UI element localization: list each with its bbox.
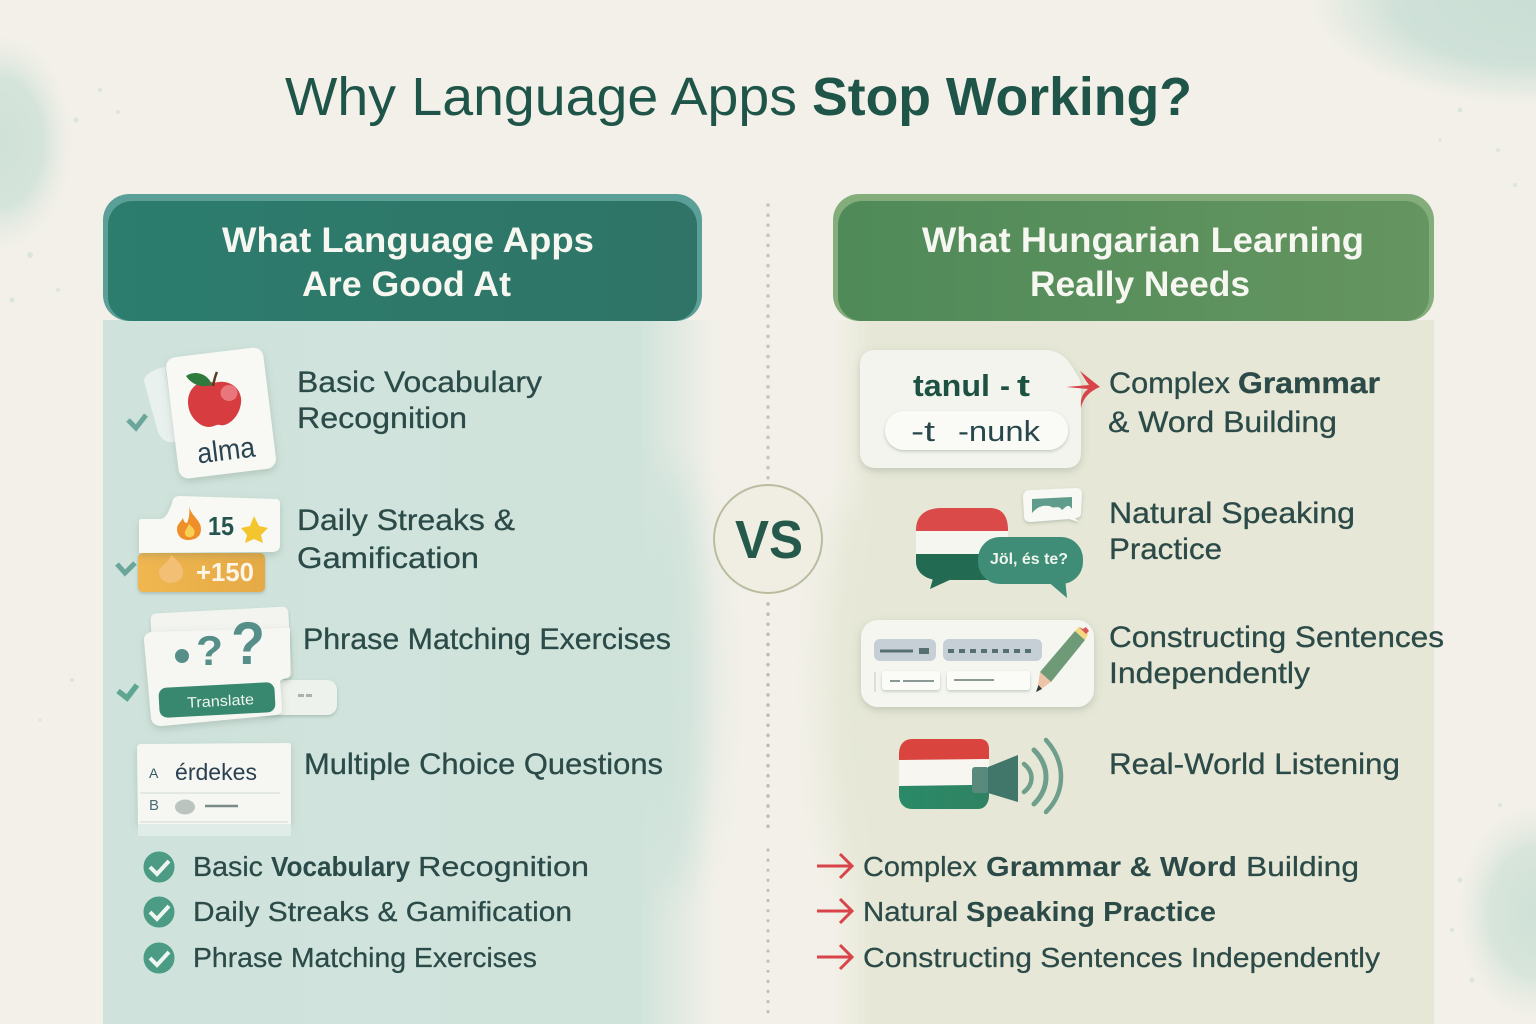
text: natural speaking practice: Practice <box>1109 533 1222 566</box>
panel heading: what language apps are good at: Are Good At <box>302 265 511 304</box>
icon: speech bubbles with flag <box>916 488 1083 598</box>
icon: translate cards: ? <box>231 610 265 677</box>
text: basic vocabulary recognition <box>297 366 542 435</box>
icon: flashcard alma: alma <box>195 431 258 470</box>
arrow item: complex grammar and word building: Building <box>1246 851 1359 882</box>
check item: basic vocabulary recognition: Vocabulary <box>271 851 410 882</box>
check item: basic vocabulary recognition: Basic <box>193 851 263 882</box>
text: constructing sentences independently <box>1109 621 1444 690</box>
icon: flag speaker <box>899 739 1061 812</box>
icon: word building card: -nunk <box>958 416 1041 448</box>
panel heading: what language apps are good at: What Language Apps <box>222 221 594 260</box>
center divider <box>766 205 770 1020</box>
arrow item: natural speaking practice <box>817 896 1216 927</box>
arrow item: constructing sentences independently: Constructing Sentences Independently <box>863 942 1380 973</box>
text: complex grammar and word building: Grammar <box>1238 367 1380 400</box>
text: daily streaks and gamification: Daily Streaks & <box>297 504 515 537</box>
title: Why Language Apps <box>285 67 797 127</box>
text: daily streaks and gamification: Gamification <box>297 542 479 575</box>
icon: multiple choice card: érdekes <box>175 759 257 785</box>
icon: multiple choice card: A <box>149 765 159 781</box>
panel heading: what language apps are good at <box>103 194 702 321</box>
left panel background <box>103 320 713 1024</box>
icon: flashcard alma <box>128 346 277 480</box>
arrow item: natural speaking practice: Speaking Practice <box>966 896 1216 927</box>
icon: multiple choice card <box>137 743 291 836</box>
text: basic vocabulary recognition: Recognition <box>297 402 467 435</box>
list: what apps do well <box>143 851 589 974</box>
VS badge <box>714 485 822 593</box>
VS badge: VS <box>735 510 803 570</box>
check item: phrase matching exercises: Phrase Matching Exercises <box>193 942 537 973</box>
arrow: to complex grammar <box>1066 371 1100 408</box>
arrow item: complex grammar and word building: Grammar & Word <box>986 851 1237 882</box>
list: what hungarian needs <box>817 851 1380 973</box>
icon: translate cards: Translate <box>187 691 254 712</box>
icon: streak and points <box>117 496 280 592</box>
icon: translate cards <box>118 606 337 726</box>
icon: translate cards: ? <box>196 627 223 674</box>
icon: streak and points: 15 <box>208 511 234 541</box>
text: daily streaks and gamification <box>297 504 515 575</box>
text: constructing sentences independently: Constructing Sentences <box>1109 621 1444 654</box>
text: complex grammar and word building <box>1108 367 1380 439</box>
title: Stop Working? <box>812 67 1192 127</box>
check item: basic vocabulary recognition: Recognition <box>418 851 589 882</box>
check item: daily streaks and gamification: Daily Streaks & Gamification <box>193 896 572 927</box>
icon: word building card: - <box>1000 368 1010 403</box>
text: complex grammar and word building: Complex <box>1109 367 1230 400</box>
right panel background <box>826 320 1434 1024</box>
arrow item: complex grammar and word building: Complex <box>863 851 977 882</box>
text: natural speaking practice: Natural Speaking <box>1109 497 1355 530</box>
text: multiple choice questions: Multiple Choice Questions <box>304 748 663 781</box>
icon: speech bubbles with flag: Jöl, és te? <box>990 551 1068 568</box>
text: complex grammar and word building: & Word Building <box>1108 406 1337 439</box>
icon: multiple choice card: B <box>149 797 159 814</box>
icon: streak and points: +150 <box>196 557 254 587</box>
text: constructing sentences independently: Independently <box>1109 657 1310 690</box>
title <box>285 67 1192 127</box>
text: natural speaking practice <box>1109 497 1355 566</box>
icon: word building card <box>860 350 1081 468</box>
arrow item: natural speaking practice: Natural <box>863 896 958 927</box>
arrow item: complex grammar and word building <box>817 851 1359 882</box>
check item: basic vocabulary recognition <box>143 851 589 883</box>
panel heading: what hungarian learning really needs: What Hungarian Learning <box>922 221 1364 260</box>
panel heading: what hungarian learning really needs: Really Needs <box>1030 265 1250 304</box>
icon: word building card: t <box>1017 368 1030 403</box>
text: phrase matching exercises: Phrase Matching Exercises <box>303 623 671 656</box>
text: real-world listening: Real-World Listening <box>1109 748 1400 781</box>
icon: word building card: -t <box>911 416 935 448</box>
icon: word building card: tanul <box>913 368 990 403</box>
text: basic vocabulary recognition: Basic Vocabulary <box>297 366 542 399</box>
panel heading: what hungarian learning really needs <box>833 194 1434 321</box>
icon: sentence builder with pencil <box>861 620 1094 707</box>
